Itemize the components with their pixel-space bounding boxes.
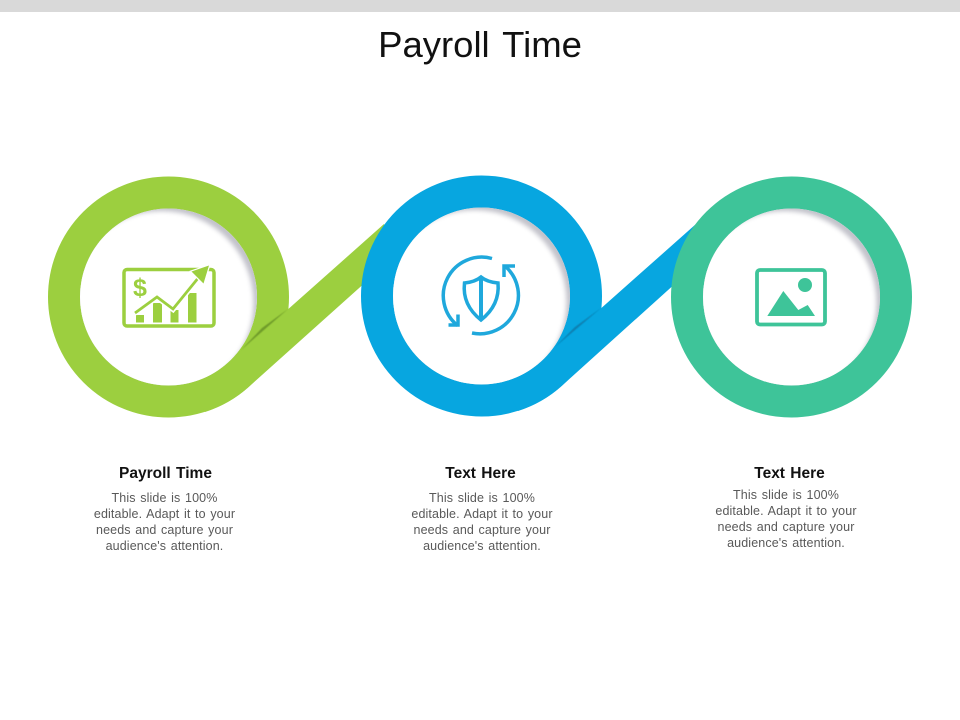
text block: right: audience's attention. [727,536,845,550]
text block: right: editable. Adapt it to your [715,504,857,518]
text block: right: Text Here [754,465,825,482]
ring graphic [48,176,912,418]
text block: right: This slide is 100% [733,488,839,502]
text block: payroll time: This slide is 100% [112,491,217,505]
text block: right [715,465,857,550]
text block: payroll time: editable. Adapt it to your [94,507,235,521]
text block: middle: editable. Adapt it to your [411,507,553,521]
teal ring [687,192,896,402]
title: Payroll Time [378,24,582,65]
blue ring with band [377,192,708,411]
text block: payroll time: needs and capture your [96,523,233,537]
icon: money chart: $ [133,274,147,302]
text block: middle: audience's attention. [423,539,541,553]
text block: middle: This slide is 100% [429,491,535,505]
icon: picture [757,270,825,324]
text block: middle: needs and capture your [414,523,550,537]
text block: payroll time: Payroll Time [119,465,212,482]
green ring with band [64,192,396,412]
icon: money chart [124,266,214,326]
icon: shield with cycle arrows [443,257,518,334]
text block: payroll time [94,465,235,553]
text block: payroll time: audience's attention. [106,539,223,553]
text block: middle [411,465,553,553]
text block: middle: Text Here [445,465,516,482]
text block: right: needs and capture your [718,520,854,534]
